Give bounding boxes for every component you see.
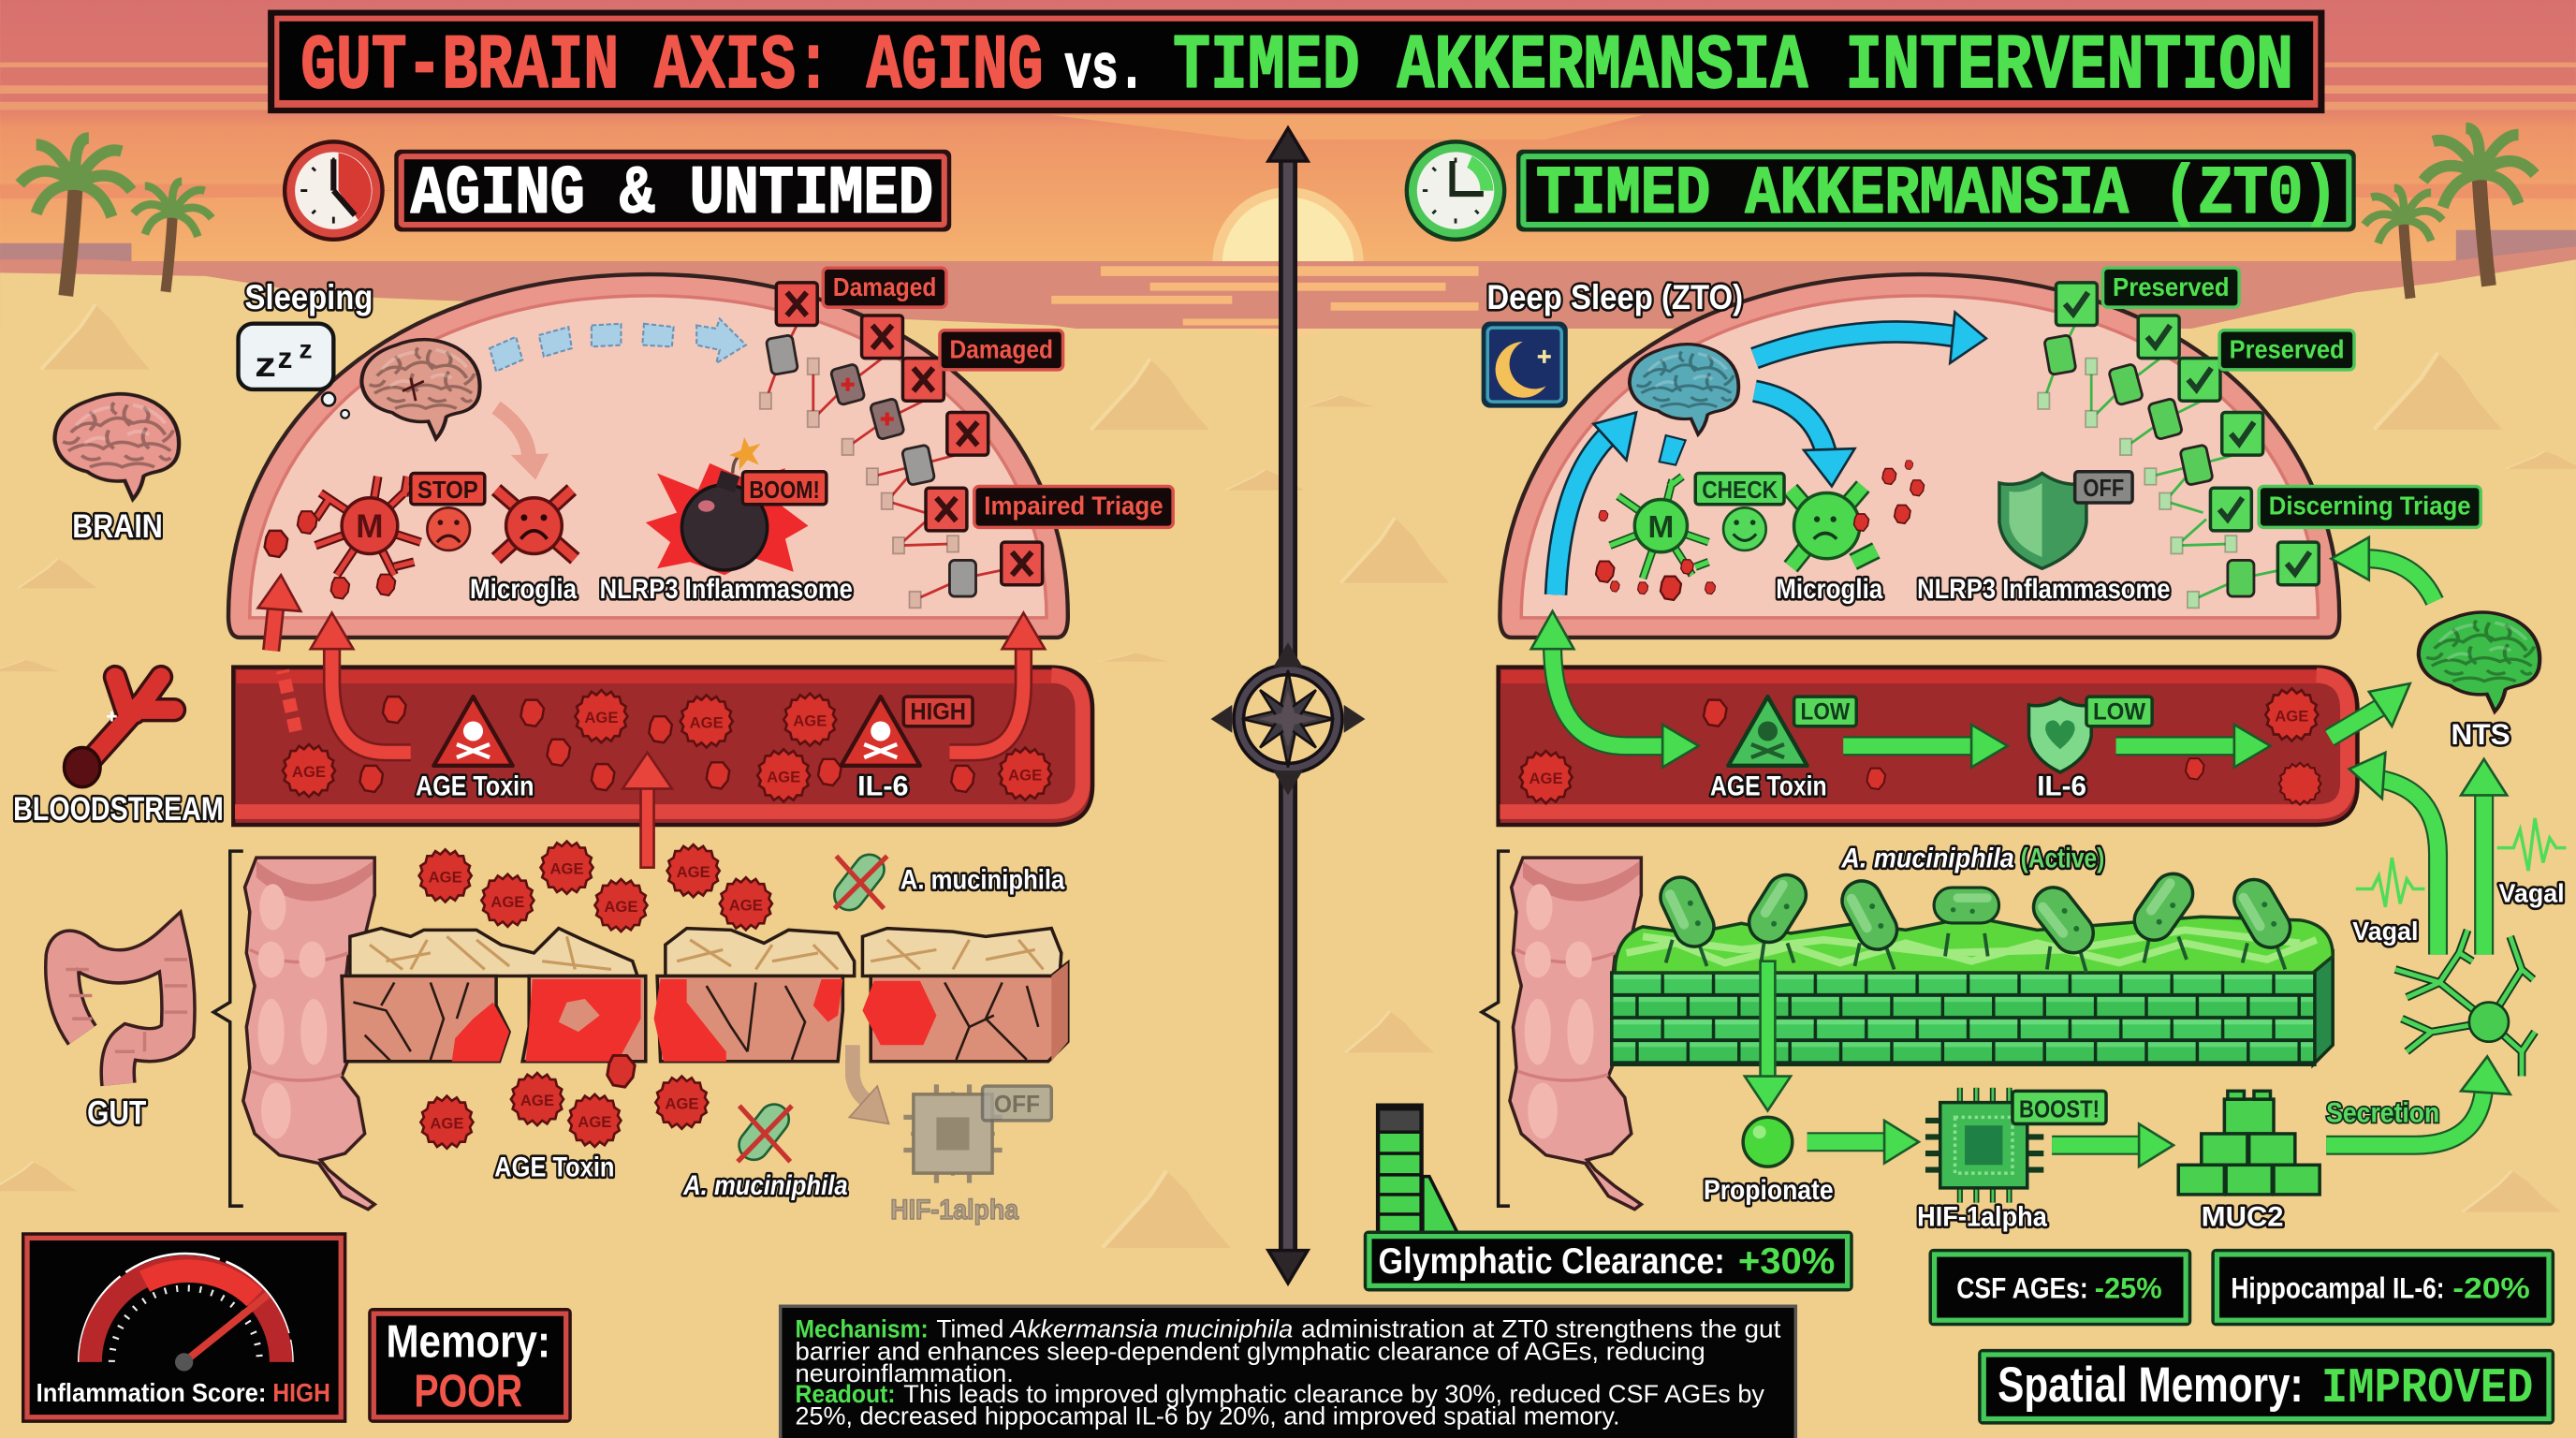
tag: high: HIGH bbox=[910, 700, 966, 726]
distant pink sea band bbox=[0, 246, 2576, 329]
bacteria pili bbox=[1666, 933, 2285, 973]
panel: memory poor: Memory: bbox=[386, 1317, 550, 1368]
reduced age particles: AGE bbox=[2275, 707, 2308, 725]
label: il-6: IL-6 bbox=[2037, 770, 2086, 801]
reduced age particles bbox=[1519, 688, 2321, 805]
icon: neuron bbox=[2395, 930, 2535, 1077]
icon: propionate bbox=[1743, 1117, 1793, 1167]
panel: mechanism text: This leads to improved glymphatic clearance by 30%, reduced CSF AGEs by bbox=[903, 1379, 1764, 1408]
dunes bbox=[0, 304, 2576, 1248]
age particles around barrier: AGE bbox=[520, 1092, 554, 1109]
icon: disabled chip bbox=[903, 1084, 1003, 1183]
age particles around barrier: AGE bbox=[677, 863, 710, 881]
panel: csf ages: CSF AGEs: bbox=[1956, 1270, 2088, 1304]
arrow: red to dome right bbox=[949, 613, 1045, 753]
icon: nts brain bbox=[2419, 612, 2539, 712]
panel: damaged barrier bbox=[342, 929, 1068, 1062]
title banner: TIMED AKKERMANSIA INTERVENTION bbox=[1173, 22, 2293, 110]
panel: csf ages bbox=[1928, 1249, 2191, 1326]
icon: low age toxin bbox=[1728, 697, 1808, 766]
arrow: chip to muc2 bbox=[2052, 1123, 2174, 1167]
label: hif-1alpha faded: HIF-1alpha bbox=[890, 1195, 1019, 1225]
tag: preserved 1 bbox=[2102, 268, 2239, 307]
icon: ecg left bbox=[2356, 858, 2424, 907]
panel: hippocampal il-6: -20% bbox=[2452, 1270, 2530, 1304]
panel: spatial memory bbox=[1978, 1349, 2554, 1425]
icon: colon bbox=[62, 943, 187, 1084]
label: age toxin: AGE Toxin bbox=[1710, 770, 1827, 801]
icon: moon bbox=[1484, 324, 1566, 405]
panel: mechanism text: Akkermansia muciniphila bbox=[1008, 1314, 1293, 1343]
panel: mechanism text: administration at ZT0 strengthens the gut bbox=[1301, 1314, 1781, 1343]
icon: inflammasome bomb bbox=[646, 437, 809, 575]
panel: inflammation gauge bbox=[22, 1232, 346, 1423]
label: a. muciniphila active: A. muciniphila bbox=[1841, 844, 2014, 874]
microglia engulfing bbox=[1791, 486, 1876, 566]
panel: inflammation gauge: HIGH bbox=[272, 1378, 330, 1407]
tag: damaged 1: Damaged bbox=[833, 272, 936, 301]
age particles around barrier: AGE bbox=[665, 1095, 698, 1113]
arrow: green from blood to dome bbox=[1531, 611, 1699, 768]
panel: mechanism text: Timed bbox=[936, 1314, 1003, 1343]
label: inflammasome: NLRP3 Inflammasome bbox=[1917, 574, 2170, 605]
title banner: GUT-BRAIN AXIS: AGING bbox=[300, 22, 1044, 110]
palm trees left bbox=[20, 138, 212, 296]
arrow: cyan to synapses bbox=[1754, 312, 1986, 363]
tag: boom: BOOM! bbox=[749, 476, 820, 504]
age particles around barrier: AGE bbox=[430, 1115, 463, 1133]
icon: il-6 warning bbox=[842, 697, 920, 766]
tag: check: CHECK bbox=[1702, 476, 1778, 504]
arrow: green stream 1 bbox=[1843, 725, 2008, 768]
icon: zzz bubble bbox=[239, 324, 349, 418]
arrow: cyan dash bbox=[1660, 435, 1686, 465]
arrow: secretion to neuron bbox=[2326, 1056, 2510, 1145]
compass rose bbox=[1211, 642, 1365, 795]
tag: damaged 1 bbox=[823, 268, 946, 307]
tag: off: OFF bbox=[2083, 474, 2124, 502]
age particles around barrier: AGE bbox=[604, 898, 638, 916]
arrow: nts to synapse bbox=[2331, 537, 2435, 601]
panel: glymphatic clearance bbox=[1364, 1231, 1853, 1291]
check marks on synapses bbox=[2056, 283, 2319, 585]
icon: brain legend bbox=[54, 394, 179, 499]
tag: preserved 2 bbox=[2219, 330, 2354, 370]
title banner bbox=[268, 10, 2324, 113]
label: vagal left: Vagal bbox=[2352, 917, 2418, 946]
tag: discerning triage: Discerning Triage bbox=[2269, 491, 2471, 520]
icon: age toxin warning bbox=[433, 697, 513, 766]
microglia active: M bbox=[356, 508, 384, 545]
panel: hippocampal il-6: Hippocampal IL-6: bbox=[2231, 1270, 2445, 1304]
section header: aging clock bbox=[283, 139, 385, 242]
arrow: weak dashed flow bbox=[490, 318, 746, 372]
debris being cleared bbox=[1596, 461, 1925, 600]
age particles around barrier: AGE bbox=[729, 896, 763, 914]
icon: zzz bubble: z bbox=[278, 341, 292, 374]
age particles around barrier: AGE bbox=[490, 893, 524, 911]
section header: timed akkermansia: TIMED AKKERMANSIA (ZT0) bbox=[1536, 155, 2337, 232]
label: deep sleep: Deep Sleep (ZTO) bbox=[1486, 278, 1743, 316]
age particles around barrier: AGE bbox=[578, 1113, 611, 1131]
tag: impaired triage: Impaired Triage bbox=[984, 491, 1164, 520]
panel: mechanism text: Readout: bbox=[795, 1379, 896, 1408]
section header: timed clock bbox=[1405, 139, 1506, 242]
tag: boost: BOOST! bbox=[2019, 1094, 2100, 1123]
active bacteria bbox=[1654, 866, 2297, 961]
label: age toxin below barrier: AGE Toxin bbox=[494, 1152, 614, 1183]
label: gut: GUT bbox=[87, 1094, 147, 1131]
panel: glymphatic clearance: +30% bbox=[1738, 1241, 1835, 1282]
panel: glymphatic clearance: Glymphatic Clearance: bbox=[1379, 1241, 1725, 1282]
gut bracket left bbox=[213, 851, 243, 1206]
label: hif-1alpha: HIF-1alpha bbox=[1917, 1201, 2047, 1232]
section header: aging and untimed: AGING & UNTIMED bbox=[411, 155, 933, 232]
tag: stop: STOP bbox=[417, 476, 478, 504]
age particles in blood: AGE bbox=[767, 768, 800, 785]
microglia surveilling: M bbox=[1648, 510, 1674, 545]
panel: mechanism text: neuroinflammation. bbox=[795, 1358, 1014, 1387]
debris bbox=[265, 511, 395, 599]
icon: clear brain bbox=[1630, 345, 1738, 434]
panel: right brain dome bbox=[1500, 274, 2339, 638]
icon: active chip bbox=[1925, 1088, 2043, 1203]
label: sleeping: Sleeping bbox=[245, 278, 373, 316]
arrow: faded to chip bbox=[849, 1045, 889, 1123]
tag: low il-6 bbox=[2086, 697, 2152, 726]
arrow: blood to nts bbox=[2330, 683, 2410, 738]
panel: hippocampal il-6 bbox=[2211, 1249, 2554, 1326]
microglia surveilling bbox=[1610, 477, 1708, 579]
microglia active bbox=[315, 477, 420, 575]
panel: inflammation gauge: Inflammation Score: bbox=[37, 1378, 266, 1407]
arrow: cyan to microglia bbox=[1754, 391, 1854, 486]
panel: right bloodstream bbox=[1499, 668, 2358, 825]
arrow: propionate to chip bbox=[1808, 1121, 1919, 1164]
panel: mechanism text: Mechanism: bbox=[795, 1314, 929, 1343]
palm trees right bbox=[2364, 128, 2535, 299]
arrow: barrier to propionate bbox=[1745, 961, 1791, 1110]
sunset sky background bbox=[0, 0, 2576, 279]
icon: sad face bbox=[427, 507, 470, 550]
label: a. muciniphila bottom: A. muciniphila bbox=[682, 1170, 848, 1201]
panel: healthy barrier bbox=[1612, 917, 2333, 1064]
label: secretion: Secretion bbox=[2326, 1098, 2439, 1129]
tag: preserved 2: Preserved bbox=[2230, 335, 2344, 364]
tag: preserved 1: Preserved bbox=[2113, 272, 2230, 301]
label: il-6: IL-6 bbox=[857, 770, 909, 801]
age particles around barrier: AGE bbox=[549, 860, 584, 878]
panel: left brain dome bbox=[228, 274, 1068, 638]
arrow: weak pink flow bbox=[496, 407, 549, 479]
icon: large intestine right bbox=[1510, 858, 1641, 1210]
age particles in blood: AGE bbox=[793, 712, 827, 730]
arrow: green stream 2 bbox=[2116, 725, 2271, 768]
age particles around barrier: AGE bbox=[429, 868, 462, 886]
panel: mechanism text: 25%, decreased hippocampal IL-6 by 20%, and improved spatial memory. bbox=[795, 1401, 1620, 1431]
icon: crossed bacterium bottom bbox=[733, 1098, 795, 1166]
label: microglia: Microglia bbox=[1776, 574, 1883, 605]
panel: mechanism text bbox=[779, 1304, 1797, 1438]
icon: il-6 shield bbox=[2029, 698, 2091, 772]
tag: low il-6: LOW bbox=[2093, 700, 2146, 726]
label: vagal right: Vagal bbox=[2498, 879, 2565, 908]
label: propionate: Propionate bbox=[1704, 1175, 1834, 1206]
arrow: red dashed up bbox=[258, 575, 300, 731]
central divider axis bbox=[1211, 128, 1365, 1284]
label: brain: BRAIN bbox=[72, 508, 163, 545]
arrow: vagal left bbox=[2349, 753, 2438, 955]
label: inflammasome: NLRP3 Inflammasome bbox=[600, 574, 853, 605]
age particles in blood: AGE bbox=[584, 709, 618, 726]
label: bloodstream: BLOODSTREAM bbox=[13, 791, 224, 828]
setting sun bbox=[1212, 187, 1364, 339]
icon: zzz bubble: z bbox=[255, 345, 276, 384]
tag: damaged 2 bbox=[940, 330, 1063, 370]
icon: glymphatic battery bbox=[1377, 1104, 1459, 1236]
icon: damaged brain bbox=[361, 340, 480, 439]
damaged synapse chain bbox=[760, 325, 1003, 608]
panel: csf ages: -25% bbox=[2095, 1270, 2162, 1304]
icon: zzz bubble: z bbox=[299, 335, 313, 364]
icon: large intestine left bbox=[243, 858, 374, 1210]
label: microglia: Microglia bbox=[470, 574, 577, 605]
tag: discerning triage bbox=[2259, 486, 2481, 527]
arrow: cyan up to brain bbox=[1556, 413, 1636, 594]
tag: off chip: OFF bbox=[994, 1090, 1040, 1118]
arrow: vagal right bbox=[2461, 759, 2507, 955]
arrow: red to dome left bbox=[311, 613, 411, 753]
icon: ecg right bbox=[2497, 818, 2566, 871]
label: nts: NTS bbox=[2452, 717, 2510, 751]
tag: impaired triage bbox=[974, 486, 1173, 527]
sun reflection bbox=[1051, 266, 1479, 325]
panel: memory poor bbox=[368, 1308, 572, 1423]
gut bracket right bbox=[1482, 851, 1510, 1206]
tag: off chip bbox=[983, 1086, 1051, 1121]
tag: low toxin: LOW bbox=[1801, 700, 1851, 726]
panel: left bloodstream bbox=[233, 668, 1092, 825]
arrow: red barrier leak bbox=[622, 753, 672, 868]
icon: inflammasome shield bbox=[1999, 473, 2086, 568]
panel: spatial memory: IMPROVED bbox=[2321, 1360, 2533, 1416]
age particles in blood: AGE bbox=[1008, 767, 1042, 785]
tag: damaged 2: Damaged bbox=[949, 335, 1053, 364]
age particles around barrier bbox=[419, 842, 772, 1149]
panel: spatial memory: Spatial Memory: bbox=[1998, 1357, 2304, 1413]
reduced age particles: AGE bbox=[1529, 770, 1563, 787]
icon: smile bbox=[1723, 507, 1766, 550]
label: a. muciniphila top: A. muciniphila bbox=[900, 864, 1065, 895]
icon: crossed bacterium top bbox=[828, 848, 890, 916]
age particles in blood: AGE bbox=[292, 763, 326, 781]
x marks on synapses bbox=[776, 283, 1043, 585]
label: a. muciniphila active: (Active) bbox=[2021, 844, 2104, 874]
icon: muc2 blocks bbox=[2178, 1091, 2320, 1195]
label: muc2: MUC2 bbox=[2202, 1201, 2284, 1232]
microglia inactive bbox=[496, 490, 575, 559]
icon: blood vessel bbox=[65, 677, 174, 787]
age particles in blood bbox=[283, 690, 1051, 801]
label: age toxin: AGE Toxin bbox=[416, 770, 534, 801]
panel: mechanism text: barrier and enhances sleep-dependent glymphatic clearance of AGEs, reducing bbox=[795, 1336, 1705, 1365]
title banner: vs. bbox=[1064, 36, 1145, 107]
preserved synapse chain bbox=[2038, 325, 2280, 608]
panel: memory poor: POOR bbox=[414, 1366, 522, 1416]
age particles in blood: AGE bbox=[690, 713, 724, 731]
